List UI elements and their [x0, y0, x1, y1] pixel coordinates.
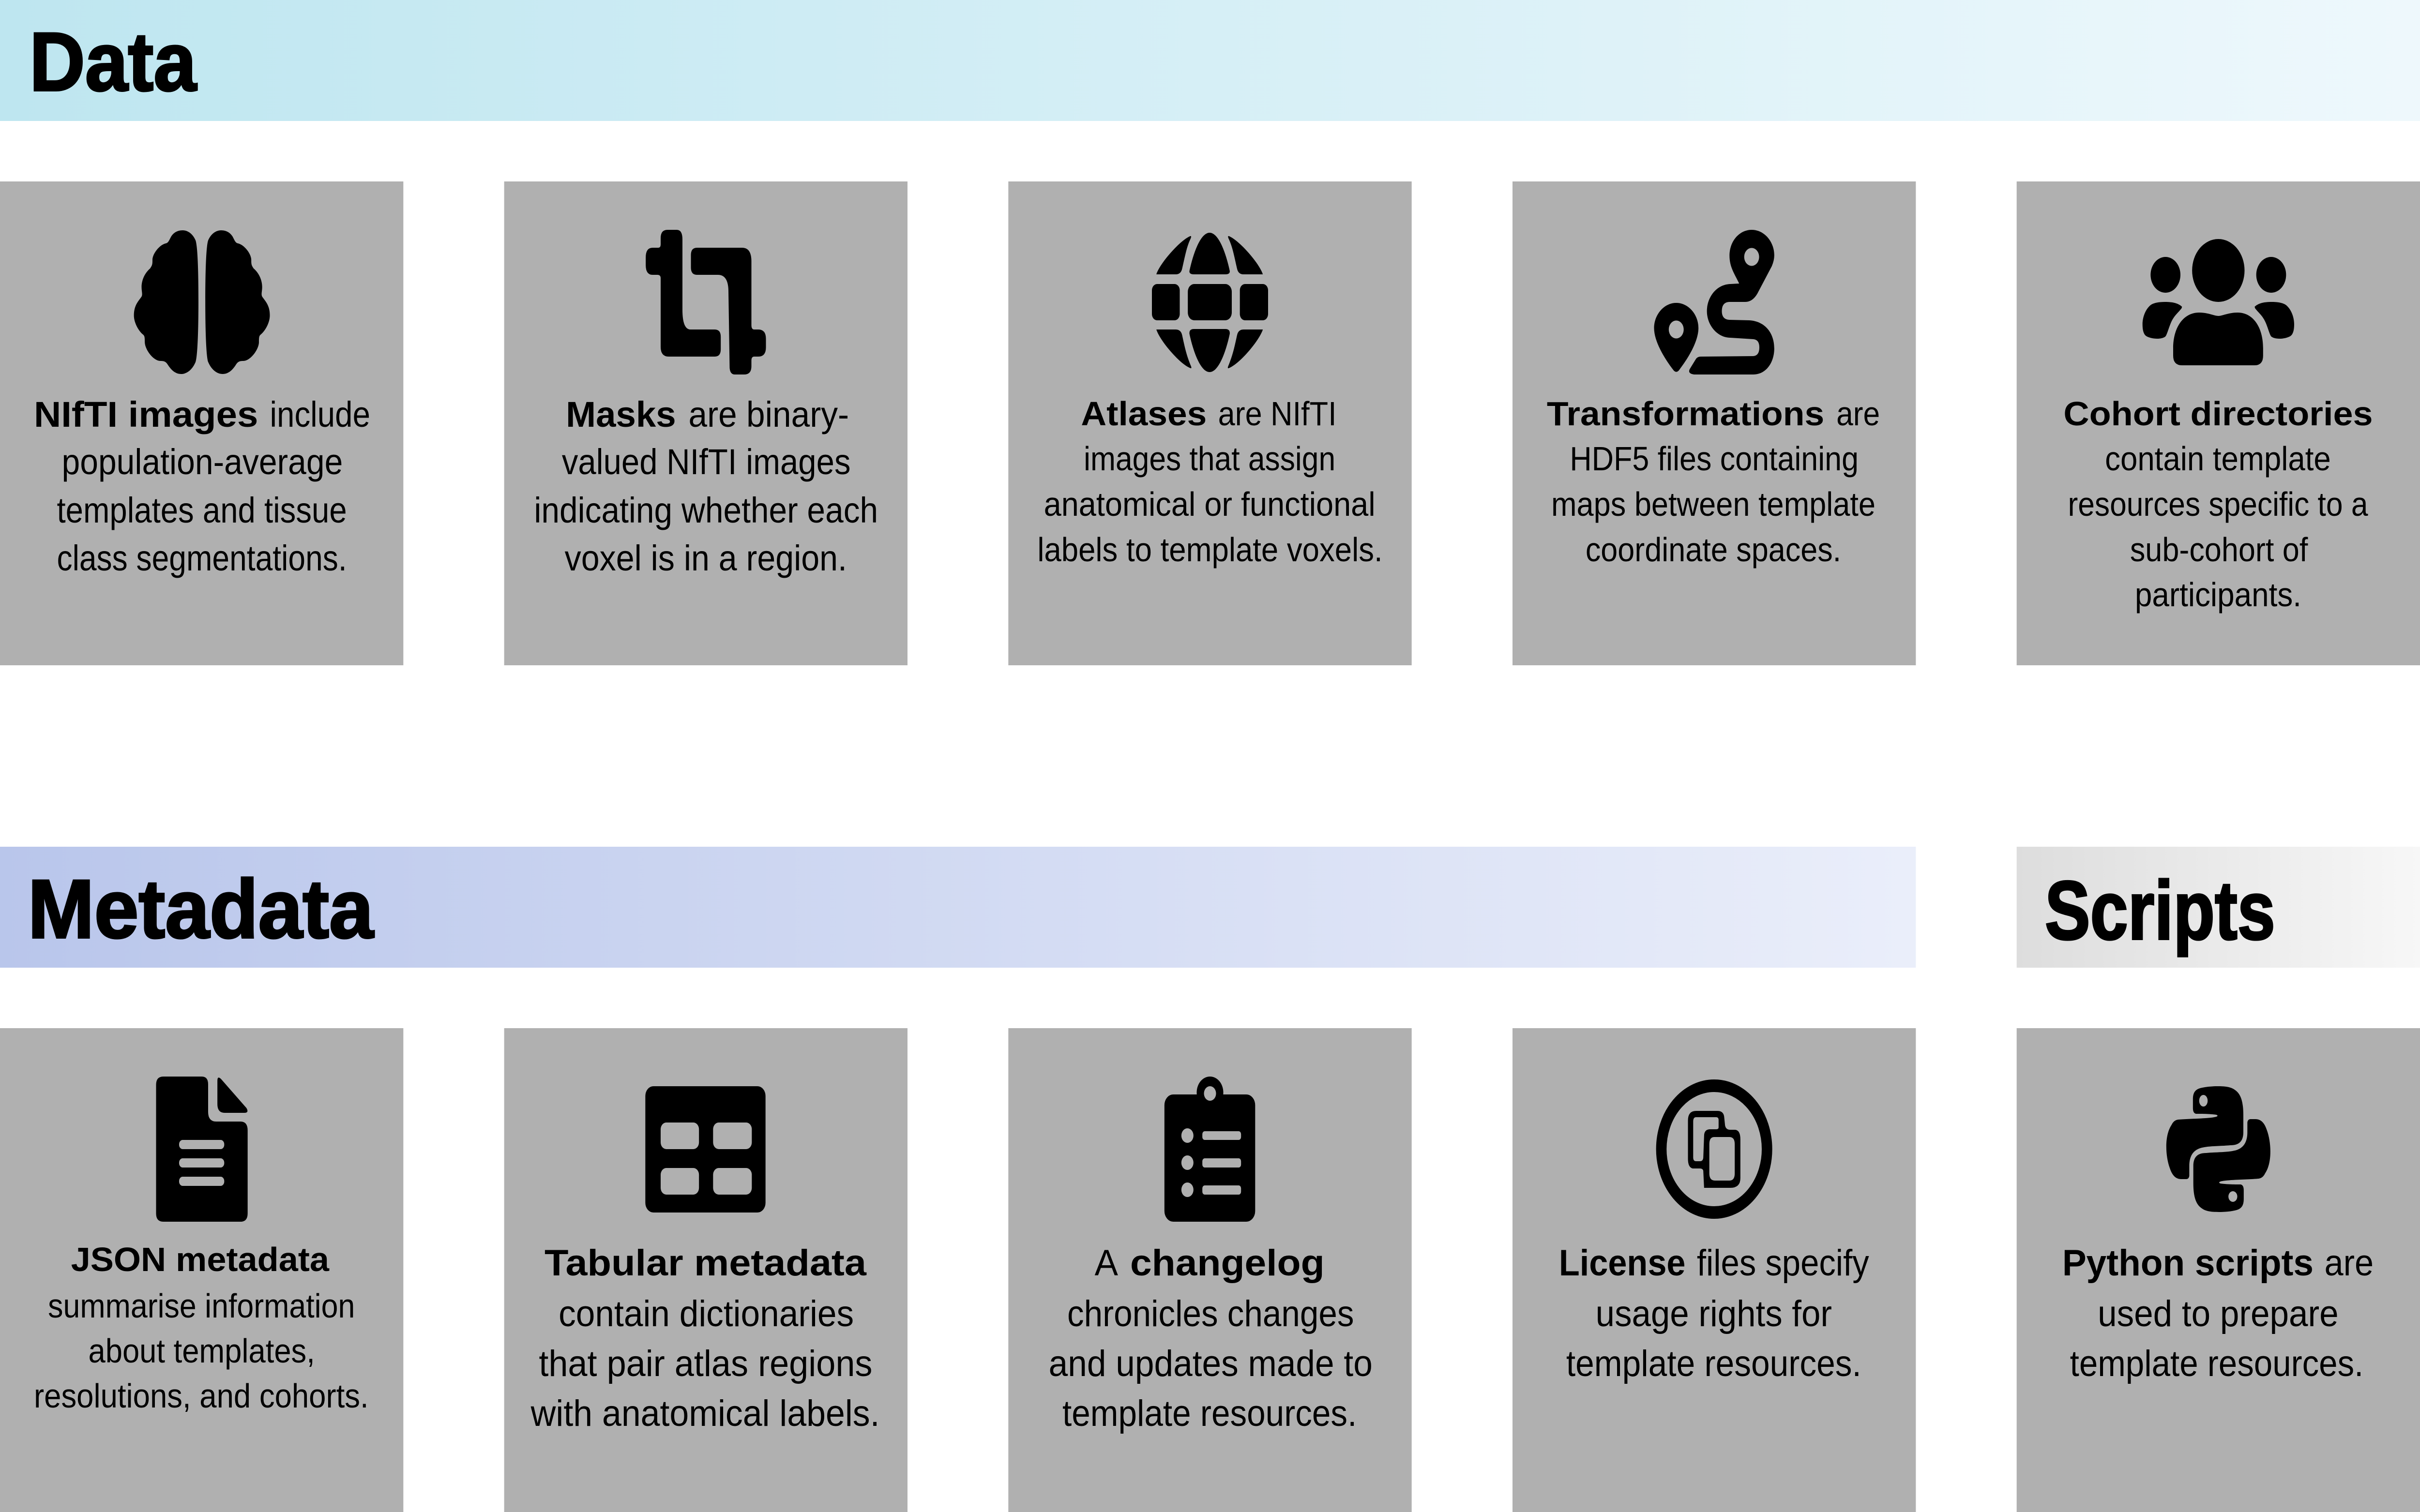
panel: Masks — [504, 181, 908, 665]
text: Masks description: Masks — [566, 395, 676, 434]
text: Cohort directories description: Cohort directories — [2063, 395, 2373, 433]
text: License description — [1559, 1243, 1869, 1384]
text: Cohort directories description: resources specific to a — [2068, 485, 2368, 523]
text: JSON metadata description: summarise information — [48, 1287, 355, 1325]
text: License description: License — [1559, 1243, 1685, 1283]
panel: Transformations — [1512, 181, 1916, 665]
text: Transformations description: maps between template — [1551, 485, 1876, 523]
icon: document — [156, 1077, 248, 1222]
text: NIfTI images description — [34, 395, 370, 578]
text: Python scripts description: used to prepare — [2098, 1293, 2339, 1334]
section header: Metadata: Metadata — [28, 863, 375, 956]
text: NIfTI images description: population-average — [62, 442, 343, 482]
text: JSON metadata description: JSON metadata — [71, 1241, 330, 1278]
text: Python scripts description: Python scripts — [2062, 1243, 2314, 1283]
section header: Scripts: Scripts — [2045, 864, 2275, 957]
text: Atlases description: anatomical or functional — [1044, 485, 1376, 523]
text: changelog description: chronicles changes — [1067, 1293, 1354, 1334]
text: Cohort directories description: contain template — [2105, 440, 2331, 478]
text: changelog description: and updates made to — [1049, 1343, 1373, 1384]
section header: Metadata — [0, 847, 1916, 968]
text: Cohort directories description: sub-cohort of — [2130, 531, 2308, 569]
section header: Data: Data — [30, 15, 197, 108]
text: Cohort directories description: participants. — [2135, 576, 2301, 614]
text: Tabular metadata description: with anatomical labels. — [530, 1393, 880, 1434]
text: Tabular metadata description: Tabular metadata — [544, 1243, 867, 1283]
text: JSON metadata description — [34, 1241, 369, 1415]
icon: route — [1654, 230, 1774, 374]
icon: table — [645, 1086, 766, 1213]
text: NIfTI images description: templates and tissue — [57, 491, 347, 530]
text: License description: template resources. — [1566, 1343, 1861, 1384]
text: License description: files specify — [1697, 1243, 1869, 1283]
icon: people — [2143, 239, 2294, 365]
section header: Data — [0, 0, 2420, 121]
panel: Python scripts — [2017, 1028, 2420, 1512]
panel: Cohort directories — [2017, 181, 2420, 665]
text: Python scripts description — [2062, 1243, 2374, 1384]
icon: globe — [1152, 233, 1268, 372]
text: Atlases description: are NIfTI — [1218, 395, 1337, 433]
text: Transformations description — [1547, 395, 1880, 569]
text: changelog description: template resources. — [1062, 1393, 1357, 1434]
panel: changelog — [1008, 1028, 1412, 1512]
panel: NIfTI images — [0, 181, 403, 665]
text: Transformations description: Transformations — [1547, 395, 1824, 433]
icon: clipboard — [1165, 1077, 1255, 1222]
icon: license badge — [1661, 1086, 1767, 1213]
text: Masks description: voxel is in a region. — [565, 539, 847, 578]
text: Masks description — [534, 395, 878, 578]
text: Python scripts description: are — [2325, 1243, 2374, 1283]
text: Atlases description — [1037, 395, 1383, 569]
text: Masks description: are binary- — [689, 395, 849, 434]
panel: JSON metadata — [0, 1028, 403, 1512]
icon: python logo — [2166, 1086, 2270, 1212]
panel: License — [1512, 1028, 1916, 1512]
text: Cohort directories description — [2063, 395, 2373, 614]
text: Tabular metadata description: that pair atlas regions — [539, 1343, 873, 1384]
icon: crop — [646, 230, 766, 374]
text: Transformations description: coordinate spaces. — [1586, 531, 1841, 569]
section header: Scripts — [2017, 847, 2420, 968]
text: Python scripts description: template resources. — [2070, 1343, 2363, 1384]
text: NIfTI images description: include — [270, 395, 370, 434]
text: Atlases description: images that assign — [1084, 440, 1335, 478]
text: Atlases description: labels to template voxels. — [1037, 531, 1383, 569]
text: JSON metadata description: resolutions, and cohorts. — [34, 1377, 369, 1415]
text: Tabular metadata description: contain dictionaries — [559, 1293, 854, 1334]
panel: Atlases — [1008, 181, 1412, 665]
text: Masks description: indicating whether each — [534, 491, 878, 530]
text: NIfTI images description: NIfTI images — [34, 395, 258, 434]
text: Tabular metadata description — [530, 1243, 880, 1434]
text: NIfTI images description: class segmentations. — [57, 539, 347, 578]
text: changelog description: changelog — [1130, 1243, 1325, 1283]
icon: brain — [134, 230, 270, 374]
panel: Tabular metadata — [504, 1028, 908, 1512]
text: changelog description — [1049, 1243, 1373, 1434]
text: License description: usage rights for — [1596, 1293, 1832, 1334]
text: Atlases description: Atlases — [1081, 395, 1207, 433]
text: Transformations description: HDF5 files containing — [1570, 440, 1859, 478]
text: JSON metadata description: about templates, — [88, 1332, 315, 1370]
text: Transformations description: are — [1836, 395, 1880, 433]
text: Masks description: valued NIfTI images — [562, 442, 851, 482]
text: changelog description: A — [1095, 1243, 1118, 1283]
